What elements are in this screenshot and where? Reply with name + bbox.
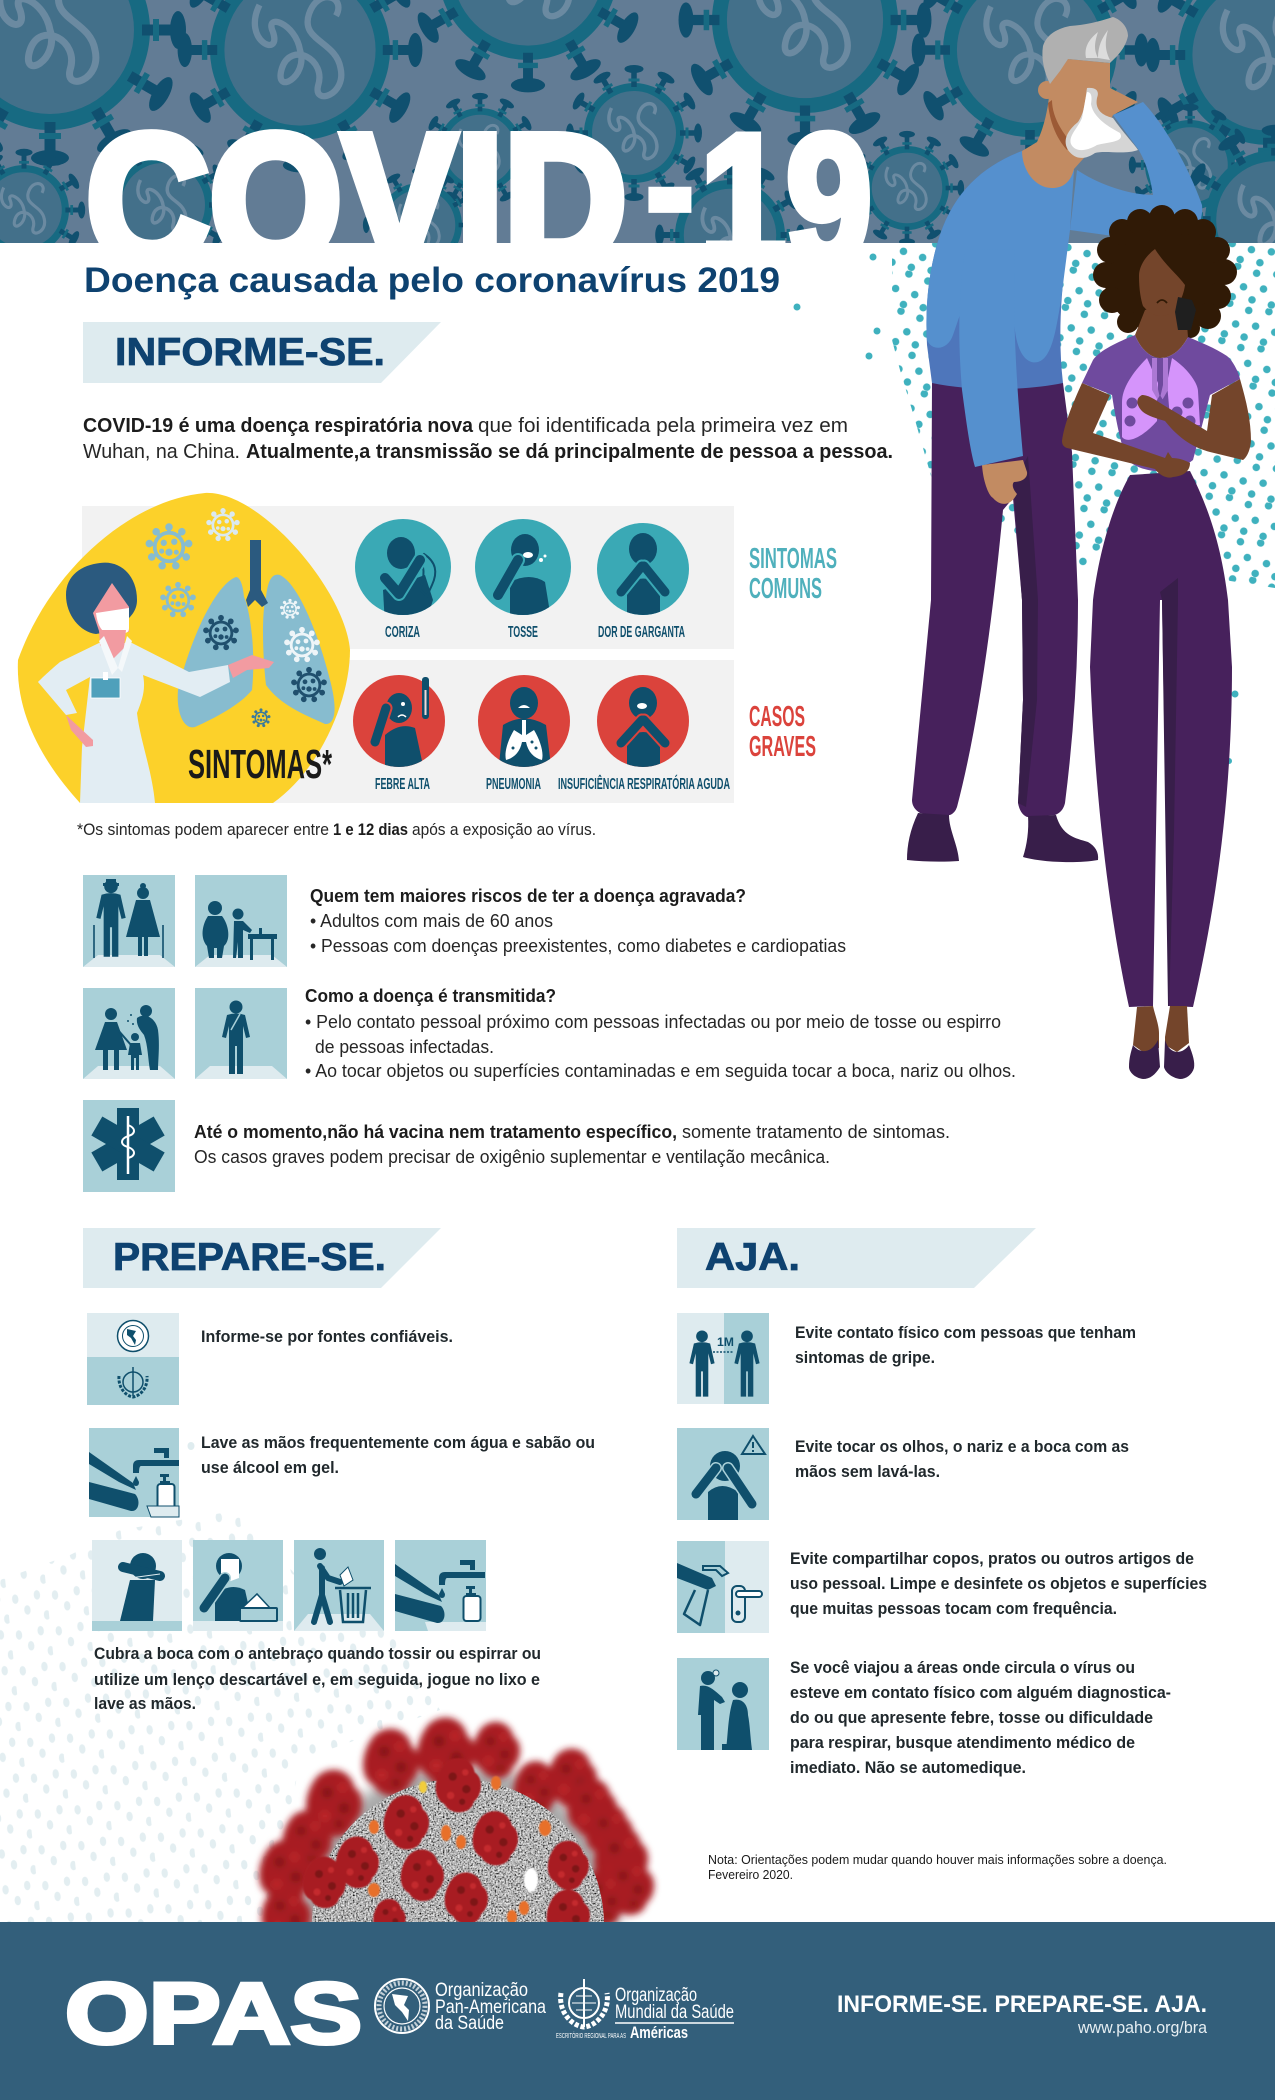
slogan: INFORME-SE. PREPARE-SE. AJA. [837, 1991, 1207, 2018]
text block: risk groups: • Pessoas com doenças preexistentes, como diabetes e cardiopatias [310, 936, 846, 956]
text: wash hands: use álcool em gel. [201, 1458, 339, 1477]
footnote: após a exposição ao vírus. [412, 820, 596, 839]
heading: sintomas comuns [749, 543, 837, 605]
text: WHO name: Organização [615, 1985, 697, 2006]
text: share and disinfect [790, 1549, 1207, 1618]
icon: cough into elbow [92, 1540, 182, 1631]
icon: person coughing [195, 988, 287, 1079]
text: avoid touching: Evite tocar os olhos, o nariz e a boca com as [795, 1437, 1129, 1456]
panel: severe cases background [82, 660, 734, 803]
text: WHO name: Américas [630, 2023, 688, 2042]
text: wash hands: Lave as mãos frequentemente com água e sabão ou [201, 1433, 595, 1452]
icon: coughing near family [83, 988, 175, 1079]
intro paragraph [83, 415, 893, 463]
text: seek care: do ou que apresente febre, tosse ou dificuldade [790, 1708, 1153, 1727]
icon: tosse [475, 519, 571, 625]
icon: febre alta [353, 675, 445, 775]
footnote: *Os sintomas podem aparecer entre [77, 820, 329, 839]
heading: sintomas comuns: SINTOMAS [749, 543, 837, 575]
footnote: 1 e 12 dias [333, 820, 408, 839]
icon: older couple [83, 875, 175, 967]
logo: WHO emblem [561, 1979, 607, 2027]
text: cover mouth: Cubra a boca com o antebraço quando tossir ou espirrar ou [94, 1644, 541, 1663]
text: WHO name: Mundial da Saúde [615, 2002, 734, 2023]
icon: keep 1 metre distance [677, 1313, 769, 1404]
illustration: woman with lungs [1062, 205, 1251, 1079]
icon: insuficiencia respiratoria aguda [597, 675, 689, 775]
text: PAHO name: da Saúde [435, 2013, 504, 2034]
icon: keep 1 metre distance: 1M [717, 1335, 734, 1349]
text block: transmission: de pessoas infectadas. [315, 1037, 494, 1057]
label: febre alta: FEBRE ALTA [375, 776, 430, 793]
note: Fevereiro 2020. [708, 1867, 793, 1882]
heading: informe-se [83, 322, 441, 383]
text: cover mouth: lave as mãos. [94, 1694, 196, 1713]
footnote [77, 820, 596, 839]
heading: casos graves: CASOS [749, 701, 805, 733]
text: seek care: para respirar, busque atendimento médico de [790, 1733, 1135, 1752]
text: cover mouth [94, 1644, 541, 1713]
text block: risk groups: • Adultos com mais de 60 anos [310, 911, 553, 931]
text: seek care: Se você viajou a áreas onde circula o vírus ou [790, 1658, 1135, 1677]
text: WHO name [556, 1985, 734, 2042]
icon: dor de garganta [597, 523, 689, 620]
intro paragraph: Wuhan, na China. [83, 441, 240, 463]
text block: transmission [305, 986, 1016, 1081]
icon: medical attention [677, 1658, 769, 1750]
label: sintomas: SINTOMAS* [188, 741, 332, 787]
heading: sintomas comuns: COMUNS [749, 573, 822, 605]
text: PAHO name: Organização [435, 1980, 528, 2001]
text block: transmission: • Pelo contato pessoal próximo com pessoas infectadas ou por meio de tosse ou espirro [305, 1012, 1001, 1032]
text: seek care: esteve em contato físico com alguém diagnostica- [790, 1683, 1171, 1702]
text block: treatment: Até o momento,não há vacina nem tratamento específico, [194, 1122, 677, 1142]
text: cover mouth: utilize um lenço descartável e, em seguida, jogue no lixo e [94, 1670, 540, 1689]
text: share and disinfect: uso pessoal. Limpe e desinfete os objetos e superfícies [790, 1574, 1207, 1593]
text: avoid contact: Evite contato físico com pessoas que tenham [795, 1323, 1136, 1342]
title: - [644, 81, 696, 288]
text block: transmission: Como a doença é transmitida? [305, 986, 556, 1006]
text block: risk groups: Quem tem maiores riscos de ter a doença agravada? [310, 886, 746, 906]
text: seek care: imediato. Não se automedique. [790, 1758, 1026, 1777]
text: wash hands [201, 1433, 595, 1477]
text: trusted sources: Informe-se por fontes confiáveis. [201, 1327, 453, 1346]
text block: treatment: Os casos graves podem precisar de oxigênio suplementar e ventilação mecânica. [194, 1147, 830, 1167]
icon: throw in trash [294, 1540, 384, 1631]
icon: pneumonia [478, 675, 570, 775]
heading: casos graves [749, 701, 816, 763]
text block: transmission: • Ao tocar objetos ou superfícies contaminadas e em seguida tocar a boca, nariz ou olhos. [305, 1061, 1016, 1081]
illustration: man with tissue [907, 17, 1202, 862]
text: share and disinfect: que muitas pessoas tocam com frequência. [790, 1599, 1117, 1618]
icon: coriza [355, 519, 451, 625]
text: PAHO name: Pan-Americana [435, 1997, 546, 2018]
website: www.paho.org/bra [1077, 2018, 1208, 2037]
text block: risk groups [310, 886, 846, 956]
teal dot background [794, 243, 1275, 764]
logo: OPAS wordmark: OPAS [65, 1966, 362, 2062]
panel: common symptoms background [82, 506, 734, 649]
label: dor de garganta: DOR DE GARGANTA [598, 624, 685, 641]
text: avoid contact [795, 1323, 1136, 1367]
icon: tissue [193, 1540, 283, 1631]
intro paragraph: COVID-19 é uma doença respiratória nova [83, 415, 474, 437]
light dot background [0, 1442, 440, 1922]
text: seek care [790, 1658, 1171, 1777]
text: avoid contact: sintomas de gripe. [795, 1348, 935, 1367]
text: WHO name: ESCRITÓRIO REGIONAL PARA AS [556, 2031, 626, 2040]
heading: prepare-se [83, 1228, 441, 1288]
icon: disinfect surfaces [677, 1541, 769, 1633]
icon: hand washing [89, 1428, 179, 1517]
note [708, 1852, 1167, 1882]
icon: do not touch face [677, 1428, 769, 1520]
icon: organisation logos [87, 1313, 179, 1405]
icon: wash hands after [395, 1540, 486, 1631]
label: pneumonia: PNEUMONIA [486, 776, 541, 793]
heading: aja [677, 1228, 1036, 1288]
label: tosse: TOSSE [508, 624, 538, 641]
text: PAHO name [435, 1980, 546, 2034]
icon: chronic conditions [195, 875, 287, 967]
illustration: nurse with lungs [18, 493, 350, 803]
title [88, 129, 870, 243]
subtitle: Doença causada pelo coronavírus 2019 [84, 261, 780, 300]
intro paragraph: que foi identificada pela primeira vez em [478, 415, 848, 437]
title: 19 [700, 97, 872, 304]
logo: PAHO emblem [375, 1979, 429, 2033]
coronavirus photo [254, 1712, 660, 1922]
header band with virus pattern [0, 0, 1275, 243]
text: avoid touching [795, 1437, 1129, 1481]
label: insuficiencia: INSUFICIÊNCIA RESPIRATÓRIA AGUDA [558, 774, 730, 793]
footer band [0, 1922, 1275, 2100]
text block: treatment: somente tratamento de sintomas. [682, 1122, 950, 1142]
text: avoid touching: mãos sem lavá-las. [795, 1462, 940, 1481]
text: share and disinfect: Evite compartilhar copos, pratos ou outros artigos de [790, 1549, 1194, 1568]
label: coriza: CORIZA [385, 624, 420, 641]
heading: prepare-se: PREPARE-SE. [113, 1236, 386, 1279]
title: COVID [86, 97, 627, 304]
heading: aja: AJA. [705, 1236, 800, 1279]
icon: star of life [83, 1100, 175, 1192]
heading: casos graves: GRAVES [749, 731, 816, 763]
text block: treatment [194, 1122, 950, 1167]
intro paragraph: Atualmente,a transmissão se dá principalmente de pessoa a pessoa. [246, 441, 893, 463]
heading: informe-se: INFORME-SE. [115, 331, 385, 374]
note: Nota: Orientações podem mudar quando houver mais informações sobre a doença. [708, 1852, 1167, 1867]
